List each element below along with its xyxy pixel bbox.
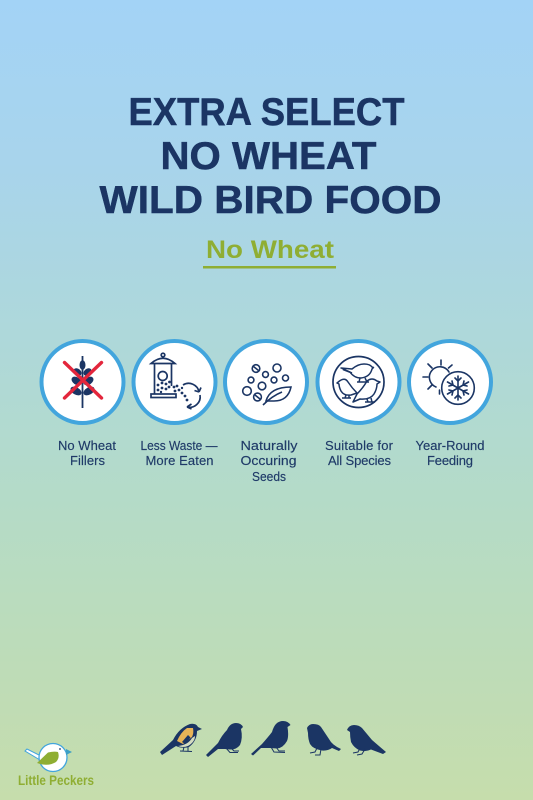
label: All Species xyxy=(328,453,392,468)
label: Occuring xyxy=(240,453,296,468)
subtitle: No Wheat xyxy=(206,236,335,264)
icon: logo bird xyxy=(25,744,72,772)
logo wordmark: Little Peckers xyxy=(18,772,94,788)
title: WILD BIRD FOOD xyxy=(100,179,442,222)
label: Feeding xyxy=(427,453,473,468)
label xyxy=(240,438,298,484)
icon: three birds in circle xyxy=(318,341,400,423)
panel: suitable for all species xyxy=(318,341,400,468)
logo: Little Peckers xyxy=(18,744,94,788)
label: More Eaten xyxy=(146,453,214,468)
label: Suitable for xyxy=(325,438,394,453)
icon: sun and snowflake xyxy=(409,341,491,423)
label: Fillers xyxy=(70,453,106,468)
icon: bird silhouette 3 xyxy=(251,721,290,756)
icon: seeds and leaf xyxy=(225,341,307,423)
label xyxy=(416,438,484,468)
label: No Wheat xyxy=(58,438,116,453)
icon: bird silhouette 5 xyxy=(347,725,386,755)
icon: bird silhouette 4 xyxy=(307,724,341,755)
title: NO WHEAT xyxy=(160,135,377,178)
birds row xyxy=(160,721,386,757)
panel: year-round feeding xyxy=(409,341,491,468)
label xyxy=(58,438,116,468)
label: Year-Round xyxy=(416,438,484,453)
label: Naturally xyxy=(240,438,298,453)
title: EXTRA SELECT xyxy=(128,91,405,134)
icon: goldfinch xyxy=(160,724,202,755)
icon: crossed out wheat xyxy=(42,341,124,423)
label xyxy=(325,438,394,468)
label: Less Waste — xyxy=(140,438,218,453)
icon: feeder with seeds xyxy=(134,341,216,423)
panel: less waste xyxy=(134,341,218,468)
label xyxy=(140,438,218,468)
title xyxy=(100,91,442,222)
icon: bird silhouette 2 xyxy=(206,723,243,757)
panel: naturally occurring seeds xyxy=(225,341,307,484)
label: Seeds xyxy=(252,469,286,484)
panel: no wheat fillers xyxy=(42,341,124,468)
